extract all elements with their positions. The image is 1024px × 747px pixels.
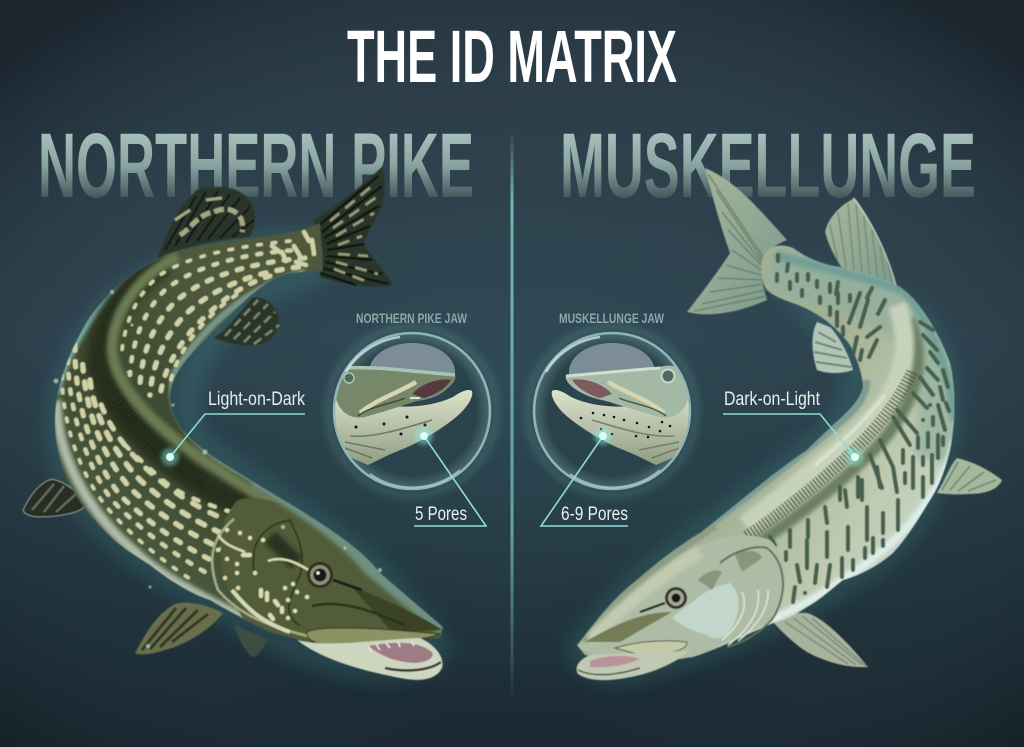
musky head bbox=[578, 535, 784, 654]
musky lower jaw bbox=[576, 650, 690, 680]
pike head shading bbox=[221, 498, 443, 645]
pike ventral fin bbox=[235, 625, 267, 657]
musky upper lip bbox=[615, 641, 687, 655]
pike rear fin bbox=[213, 297, 279, 345]
pike jaw label: NORTHERN PIKE JAW bbox=[356, 310, 468, 326]
musky jaw pores bbox=[580, 412, 671, 438]
pike lower jaw bbox=[297, 638, 443, 680]
musky dorsal fin bbox=[825, 198, 898, 293]
musky belly rim bbox=[700, 440, 955, 652]
water droplets bbox=[54, 290, 382, 648]
musky pores callout bbox=[541, 427, 628, 526]
musky eye bbox=[640, 587, 687, 612]
pike upper lip bbox=[307, 628, 440, 644]
pike back stripes bbox=[100, 262, 250, 508]
musky gill plate bbox=[672, 547, 783, 647]
pike left fin bbox=[23, 479, 84, 517]
musky jaw upper bbox=[566, 366, 691, 418]
pike jaw lower bbox=[330, 390, 472, 465]
pike cheek line bbox=[312, 604, 405, 625]
musky rear fin bbox=[812, 322, 853, 373]
pike tail fin bbox=[313, 167, 393, 287]
musky body bbox=[577, 246, 954, 665]
pike pores callout bbox=[414, 427, 486, 526]
callout: light-on-dark: Light-on-Dark bbox=[208, 389, 305, 410]
pike peduncle blotches bbox=[272, 232, 314, 265]
magnifier: muskellunge jaw bbox=[528, 310, 696, 526]
pike gill cover bbox=[212, 519, 330, 642]
center divider bbox=[510, 130, 514, 705]
musky lower fin bbox=[773, 613, 868, 667]
pike spots bbox=[62, 241, 308, 582]
musky jaw lower bbox=[552, 390, 694, 465]
pike eye bbox=[307, 562, 362, 590]
musky bars bbox=[770, 255, 949, 602]
musky pores callout: 6-9 Pores bbox=[561, 504, 628, 525]
magnifier: northern pike jaw bbox=[328, 310, 496, 526]
pike lower pectoral fin bbox=[135, 603, 223, 654]
musky right fin bbox=[937, 458, 1002, 494]
callout: dark-on-light bbox=[723, 389, 864, 466]
muskellunge jaw label: MUSKELLUNGE JAW bbox=[559, 310, 665, 326]
pike inner rim bbox=[168, 268, 306, 484]
fish: northern pike bbox=[23, 167, 445, 680]
heading: northern pike: NORTHERN PIKE bbox=[38, 115, 474, 217]
callout: dark-on-light: Dark-on-Light bbox=[724, 389, 821, 410]
pike jaw pores bbox=[354, 416, 426, 436]
musky lateral band bbox=[757, 319, 918, 544]
musky inner rim bbox=[713, 378, 872, 526]
pike pores callout: 5 Pores bbox=[415, 504, 467, 525]
pike jaw upper bbox=[333, 367, 456, 418]
musky upper teal tones bbox=[770, 270, 939, 460]
title: THE ID MATRIX bbox=[347, 15, 677, 98]
pike body bbox=[55, 223, 443, 642]
musky tail fin bbox=[687, 168, 787, 314]
pike outer rim and belly bbox=[57, 266, 147, 398]
fish: muskellunge bbox=[576, 168, 1002, 680]
callout: light-on-dark bbox=[161, 389, 305, 466]
pike dorsal fin bbox=[157, 187, 255, 258]
